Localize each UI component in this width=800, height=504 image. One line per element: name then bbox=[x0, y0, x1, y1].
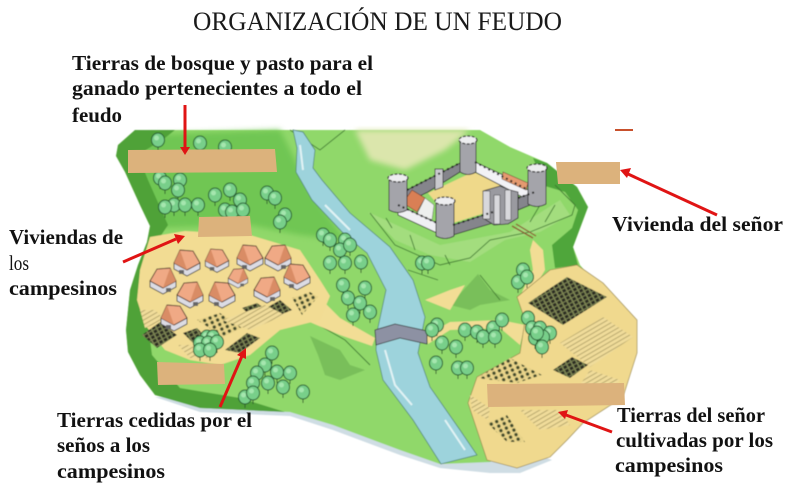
arrow: houses bbox=[123, 234, 185, 262]
lord's fields ground bbox=[468, 265, 637, 468]
label: peasant houses: Viviendas de bbox=[9, 225, 123, 249]
scarp below castle bbox=[368, 200, 570, 262]
arrow: peasant land bbox=[220, 348, 246, 407]
label: lord's land: cultivadas por los bbox=[616, 428, 773, 452]
label patch: peasant land bbox=[157, 362, 225, 385]
crenellations bbox=[398, 162, 535, 225]
label: peasant houses bbox=[9, 225, 123, 300]
village crop fields bbox=[140, 292, 318, 358]
bridge bbox=[375, 324, 427, 345]
label: forest land bbox=[72, 51, 373, 127]
arrow: forest bbox=[180, 105, 190, 155]
label: peasant houses: los bbox=[9, 251, 29, 275]
arrow: lord's house bbox=[620, 168, 717, 215]
wall back-left bbox=[407, 163, 460, 202]
tower south bbox=[436, 201, 454, 238]
trees bbox=[152, 133, 556, 408]
land shadow bbox=[155, 397, 552, 473]
label: ceded land bbox=[57, 408, 252, 483]
tower east bbox=[528, 168, 546, 206]
wall to east tower bbox=[518, 192, 535, 210]
small red mark bbox=[615, 129, 633, 131]
label: lord's house: Vivienda del señor bbox=[612, 212, 783, 236]
houses bbox=[150, 245, 310, 331]
label: peasant houses: campesinos bbox=[9, 276, 117, 300]
front-left wall bbox=[398, 205, 437, 233]
label: forest land: Tierras de bosque y pasto para el bbox=[72, 51, 373, 75]
scarp lines bbox=[290, 130, 575, 365]
dark green hillside bbox=[533, 158, 588, 268]
lord's hall roof bbox=[502, 172, 528, 190]
gatehouse bbox=[483, 186, 518, 225]
hall by west wall bbox=[403, 190, 425, 212]
label: lord's land: Tierras del señor bbox=[617, 403, 765, 427]
label: ceded land: seños a los bbox=[57, 433, 150, 457]
village ground bbox=[137, 231, 330, 365]
map: fief landscape bbox=[116, 130, 637, 473]
lord's crop fields bbox=[470, 277, 633, 442]
tower west bbox=[389, 178, 407, 212]
lower hill patches bbox=[310, 336, 365, 380]
pale upper hill bbox=[355, 130, 470, 170]
tower north bbox=[460, 140, 476, 174]
label: forest land: ganado pertenecientes a todo el bbox=[72, 76, 362, 100]
label: lord's land: campesinos bbox=[615, 453, 723, 477]
label patch: lord's land bbox=[487, 383, 625, 407]
forest shading bbox=[140, 130, 345, 240]
label patch: forest bbox=[128, 149, 277, 173]
label: forest land: feudo bbox=[72, 103, 122, 127]
road east bbox=[425, 240, 545, 345]
drawbridge bbox=[512, 224, 536, 238]
wall back-right bbox=[475, 162, 528, 200]
river highlights bbox=[300, 145, 465, 450]
front-right wall bbox=[453, 212, 493, 235]
courtyard bbox=[428, 172, 502, 223]
small tower bbox=[435, 169, 443, 190]
castle bbox=[388, 136, 547, 238]
dark green left edge bbox=[116, 130, 285, 412]
river bbox=[293, 130, 477, 464]
label: lord's land bbox=[615, 403, 773, 477]
label: ceded land: campesinos bbox=[57, 459, 165, 483]
land base bbox=[116, 130, 610, 464]
label patch: houses bbox=[198, 216, 252, 237]
label: ceded land: Tierras cedidas por el bbox=[57, 408, 252, 432]
label patch: lord's house bbox=[556, 162, 620, 184]
title: ORGANIZACIÓN DE UN FEUDO bbox=[193, 7, 562, 36]
road to bridge bbox=[305, 296, 375, 346]
arrow: lord's land bbox=[558, 410, 612, 432]
